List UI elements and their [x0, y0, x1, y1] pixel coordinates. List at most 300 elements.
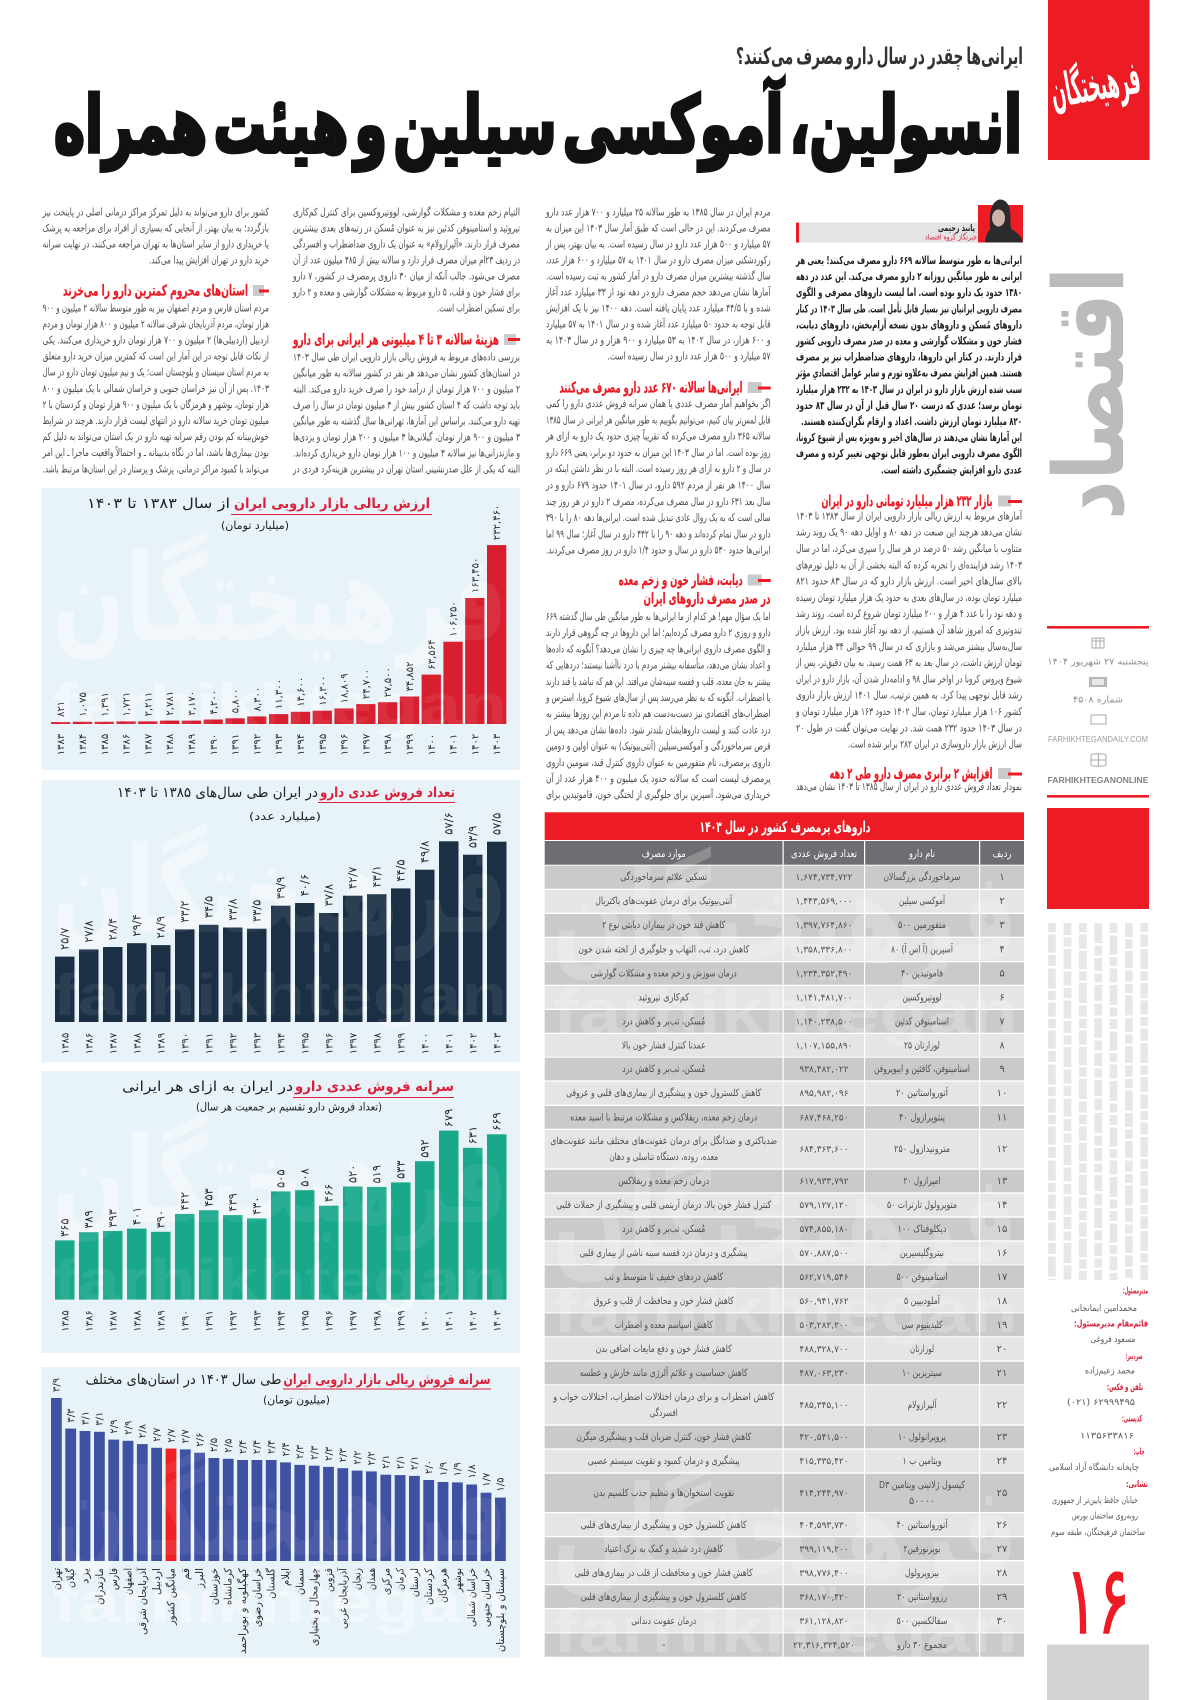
table rows text: ۱۱ [997, 1112, 1007, 1124]
table rows text: متفورمین ۵۰۰ [898, 920, 946, 931]
masthead credits: ۱۱۳۵۶۳۳۸۱۶ [1080, 1432, 1134, 1442]
column 2 opening paragraph [545, 207, 771, 363]
value labels: ۲۴,۷۰۰ [361, 669, 372, 699]
masthead logo panel [1046, 0, 1150, 160]
table rows text: کاهش کلسترول خون و پیشگیری از بیماری‌های قلبی و عروقی [566, 1087, 761, 1099]
section: 232 thousand billion toman market: در سال ۱۴۰۳ حدود ۲۳۲ همت شد. در نهایت می‌توان گفت در طول ۲۰ [796, 721, 1022, 734]
year labels: ۱۴۰۲ [470, 734, 481, 755]
table rows text: آموکسی سیلین [899, 894, 946, 907]
sidebar decorative gray pattern [1052, 923, 1144, 1280]
section: 232 thousand billion toman market: سال ارزش بازار داروسازی در ایران ۲۸۲ برابر شده است. [848, 739, 1022, 751]
value labels: ۲/۱ [410, 1456, 421, 1470]
watermark: فرهیختگان [52, 530, 508, 669]
section: 232 thousand billion toman market: آمارهای مربوط به ارزش ریالی بازار دارویی ایران از سال ۱۳۸۳ تا ۱۴۰۳ [796, 509, 1023, 522]
section: 232 thousand billion toman market: سال‌به‌سال بیشتر می‌شد و بازاری که در سال ۹۹ حوالی ۳۴ هزار میلیارد [796, 641, 1022, 653]
table rows text: پروپرانولول ۱۰ [898, 1432, 946, 1443]
table title bar: داروهای پرمصرف کشور در سال ۱۴۰۳ [700, 818, 871, 837]
table rows text: ۱,۲۳۴,۳۵۲,۴۹۰ [796, 970, 852, 980]
value labels: ۵۷/۵ [490, 813, 504, 835]
table rows text: ۱۴ [997, 1200, 1007, 1211]
chart title: از سال ۱۳۸۳ تا ۱۴۰۳ [87, 496, 230, 512]
section: deprived provinces buy the least: از نکات قابل توجه در این آمار این است که کمترین میزان خرید دارو متعلق [43, 350, 269, 363]
issue information block: شماره ۴۵۰۸ [1073, 696, 1123, 706]
section: deprived provinces buy the least: هزار تومان، مردم آذربایجان شرقی سالانه ۲ میلیون و ۸۰۰ هزار تومان و مردم [43, 317, 269, 330]
value labels: ۴,۲۰۰ [209, 690, 220, 714]
panel: per-capita spending by province chart [42, 1367, 520, 1658]
chart title [87, 496, 432, 532]
author box: خبرنگار گروه اقتصاد [925, 232, 977, 242]
section: diabetes, blood pressure and ulcers: دارو و روزی ۲ دارو مصرف کرده‌ایم؛ اما این داروها در چه گروهی قرار دارند [546, 626, 771, 639]
lead paragraph: ایرانی به طور میانگین روزانه ۲ دارو مصرف می‌کند. این عدد در دهه [796, 270, 1022, 283]
table rows text: ۲۸ [997, 1568, 1008, 1579]
year labels: ۱۳۹۸ [383, 733, 394, 755]
icon: calendar [1092, 638, 1104, 648]
column 4 opening paragraph [42, 207, 269, 267]
province labels: مازندران [94, 1568, 106, 1605]
value labels [52, 1378, 507, 1492]
section: deprived provinces buy the least: بودن بیماری‌ها باشد، اما در نگاه بدبینانه ـ و احتمالاً واقعیت ماجرا ـ این امر [42, 446, 269, 459]
year labels: ۱۳۸۸ [132, 1032, 144, 1054]
table rows text: کاهش درد شدید و کمک به ترک اعتیاد [604, 1544, 723, 1555]
province labels: ایلام [280, 1568, 292, 1586]
year labels: ۱۳۸۹ [156, 1033, 168, 1054]
value labels: ۱۶۳,۴۵۰ [470, 558, 481, 593]
table rows text: ۱۶ [997, 1248, 1007, 1259]
year labels: ۱۳۸۴ [78, 734, 89, 755]
table rows text: سرماخوردگی بزرگسالان [884, 871, 960, 883]
table rows text: ۵۰۳,۲۸۲,۲۰۰ [799, 1321, 849, 1331]
value labels: ۶۷۹ [442, 1109, 456, 1127]
table watermark: farhikhtegan [552, 1597, 1018, 1666]
table rows text: - [662, 1640, 666, 1651]
table column headers: ردیف [992, 848, 1012, 860]
chart title: در ایران به ازای هر ایرانی [122, 1079, 293, 1095]
section: deprived provinces buy the least: میلیون تومان خرید سالانه دارو در انتهای لیست قرار دارند. هرچند در شرایط [43, 415, 269, 427]
province labels: کرمان [395, 1568, 407, 1590]
section: deprived provinces buy the least: می‌تواند با کمبود مراکز درمانی، پزشک و پرستار در این استان‌ها مرتبط باشد. [43, 463, 269, 475]
section: 232 thousand billion toman market: متناوب با میانگین رشد ۵۰ درصد در هر سال را سپری می‌کرد، اما در سال [796, 542, 1022, 555]
lead paragraph: قرار دارند. در کنار این داروها، داروهای ضداضطراب نیز پر مصرف [796, 351, 1022, 364]
section: Iranians consume 670 drugs a year: ایرانی‌ها سالانه ۶۷۰ عدد دارو مصرف می‌کنند [560, 379, 742, 397]
table rows text: ویتامین ب ۱ [902, 1456, 942, 1467]
value labels: ۲,۲۱۱ [143, 692, 154, 716]
year labels: ۱۴۰۲ [468, 1310, 480, 1332]
table rows text: کاهش کلسترول خون و پیشگیری از بیماری‌های قلبی [581, 1591, 747, 1603]
section: annual cost per Iranian: البته که یکی از علل صدرنشینی استان تهران در بیشترین هزینه‌کرد فردی در [292, 463, 520, 475]
value labels: ۱/۹ [438, 1462, 449, 1476]
province labels: چهارمحال و بختیاری [309, 1568, 321, 1646]
section: Iranians consume 670 drugs a year: سال بعد ۶۳۱ دارو در سال مصرف می‌کرده، مصرف ۲ دارو در هر روز چند [546, 496, 771, 508]
watermark: farhikhtegan [52, 1570, 507, 1635]
year labels: ۱۳۹۰ [180, 1310, 192, 1332]
year labels: ۱۳۹۱ [204, 1033, 216, 1054]
table rows text: ۱۸ [997, 1296, 1008, 1307]
chart title: ارزش ریالی بازار دارویی ایران [234, 496, 430, 512]
watermark overlay: farhikhtegan [52, 673, 507, 738]
table rows text: ۳۰ [997, 1616, 1007, 1627]
lead paragraph: مصرف دارویی ایرانیان نیز بسیار قابل تأمل است. طی سال ۱۴۰۳ در کنار [795, 301, 1022, 315]
table rows text: ۲۳ [997, 1432, 1008, 1443]
lead paragraph: هستند. همین افزایش مصرف به‌علاوه تورم و سایر عوامل اقتصادیِ مؤثر [795, 367, 1022, 380]
table rows text: ۵۶۰,۹۴۱,۷۶۲ [799, 1297, 849, 1307]
value labels: ۵۰۵ [274, 1169, 288, 1188]
province labels: بوشهر [452, 1568, 464, 1593]
year labels: ۱۳۹۲ [252, 734, 263, 755]
value labels: ۲/۱ [381, 1455, 392, 1469]
year labels: ۱۳۸۳ [56, 733, 67, 755]
value labels: ۲/۹ [123, 1421, 134, 1435]
table rows text: ۲۱ [997, 1368, 1007, 1379]
section: Iranians consume 670 drugs a year: در سال و ۲ دارو به ازای هر روز رسیده است. البته با در نظر داشتن اینکه در [545, 463, 771, 475]
value labels: ۳/۹ [52, 1378, 63, 1392]
value labels: ۲۸/۴ [106, 918, 120, 940]
column 3 opening paragraph: تیروئید و استامینوفن کدئین نیز به عنوان مُسکن در رتبه‌های بعدی بیشترین [293, 223, 520, 235]
year labels: ۱۳۹۷ [361, 733, 372, 755]
year labels: ۱۳۸۶ [84, 1310, 96, 1332]
section: diabetes, blood pressure and ulcers: بیشتر به جان معده، قلب و قفسه سینه‌شان می‌افتد. این هم که نباشد یا قند دارند [546, 676, 771, 688]
year labels: ۱۳۹۳ [274, 733, 285, 755]
column 3 opening paragraph: برای فشار خون و قلب، ۵ دارو مربوط به مشکلات گوارشی و معده و ۲ دارو [292, 286, 520, 299]
table rows text: بیزوپرولول [905, 1568, 939, 1579]
watermark overlay: فرهیختگان [52, 1112, 508, 1251]
table rows text: پنتوپرازول ۴۰ [899, 1112, 945, 1124]
table rows text: لوزارتان ۲۵ [904, 1040, 940, 1052]
value labels: ۶۳۱ [466, 1126, 480, 1144]
table rows text: درمان عفونت دندانی [631, 1616, 696, 1627]
lead paragraph: ایرانی‌ها به طور متوسط سالانه ۶۶۹ دارو مصرف می‌کنند! یعنی هر [795, 254, 1022, 267]
year labels: ۱۳۸۸ [165, 733, 176, 755]
table rows text: کاهش حساسیت و علائم آلرژی مانند خارش و عطسه [580, 1366, 748, 1379]
table rows text: لووتیروکسین [902, 992, 942, 1004]
table rows text: ۱,۶۷۴,۷۳۴,۷۲۲ [796, 873, 853, 883]
year labels: ۱۳۹۶ [324, 1033, 336, 1054]
table rows text: ۲۷ [997, 1544, 1008, 1555]
table rows text: کاهش درد، تب، التهاب و جلوگیری از لخته شدن خون [578, 944, 749, 956]
masthead credits: ۶۲۹۹۹۴۹۵ (۰۲۱) [1067, 1398, 1135, 1408]
bars [51, 1398, 506, 1561]
chart title [122, 1079, 454, 1114]
table rows text: ۴۱۵,۳۳۵,۴۲۰ [799, 1457, 849, 1467]
section: 232 thousand billion toman market: میلیارد تومان بوده، در سال‌های بعدی به حدود یک هزار میلیارد تومان رسیده [796, 592, 1022, 604]
table rows text: ۶۱۷,۹۳۳,۷۹۲ [799, 1177, 849, 1187]
lead paragraph: این آمارها نشان می‌دهند در سال‌های اخیر و به‌ویژه پس از شیوع کرونا، [796, 430, 1022, 444]
year labels: ۱۳۹۵ [318, 734, 329, 755]
value labels: ۱,۷۲۱ [122, 692, 133, 716]
column 3 opening paragraph: برای تسکین اضطراب است. [437, 303, 520, 315]
value labels: ۴۹/۸ [418, 841, 432, 863]
lead paragraph: ۱۳۸۰ حدود یک دارو بوده است. اما لیست داروهای مصرفی و الگوی [796, 286, 1022, 299]
value labels: ۳۳/۵ [250, 900, 264, 922]
chart title: (میلیارد تومان) [221, 519, 289, 532]
table rows text: ۲۰ [997, 1344, 1007, 1355]
column 2 opening paragraph: شده و با ۴۴/۵ میلیارد عدد پایان یافته است. دهه ۱۴۰۰ نیز با یک افزایش [546, 303, 771, 315]
section: doubling over two decades [796, 764, 1022, 793]
year labels: ۱۳۸۸ [132, 1310, 144, 1332]
value labels: ۱/۵ [496, 1477, 507, 1492]
value labels: ۲/۳ [295, 1444, 306, 1459]
section: 232 thousand billion toman market: کشور ۱۰۶ هزار میلیارد تومان، سال ۱۴۰۲ حدود ۱۶۳ هزار میلیارد تومان و [795, 706, 1022, 718]
value labels: ۳,۱۷۰ [187, 691, 198, 716]
year labels: ۱۳۹۴ [276, 1033, 288, 1054]
table rows text: ۴۸۷,۰۶۳,۲۳۰ [799, 1369, 849, 1379]
section: 232 thousand billion toman market: بازار ۲۳۲ هزار میلیارد تومانی دارو در ایران [822, 492, 992, 510]
table rows text: کاهش فشار خون و محافظت از قلب در بیماری‌های قلبی [575, 1568, 753, 1579]
year labels: ۱۳۸۶ [122, 734, 133, 755]
lead paragraph: داروهای مُسکن و داروهای بدون نسخه آرام‌بخش، داروهای دیابت، [796, 317, 1022, 331]
value labels: ۲/۷ [152, 1427, 163, 1442]
province labels: تهران [51, 1568, 63, 1590]
issue information block: پنجشنبه ۲۷ شهریور ۱۴۰۴ [1048, 658, 1149, 668]
year labels: ۱۴۰۰ [420, 1033, 432, 1054]
table rows text: ۵۰۰۰۰ [909, 1496, 935, 1507]
lead paragraph: سبب شده ارزش بازار دارو در ایران در سال ۱۴۰۳ به ۲۳۲ هزار میلیارد [796, 383, 1022, 396]
table rows text: ۴۱۴,۲۴۴,۹۷۰ [799, 1489, 849, 1499]
value labels: ۱/۸ [467, 1464, 478, 1478]
bars [55, 841, 506, 1022]
value labels: ۳۹۰ [154, 1210, 168, 1228]
value labels: ۵,۸۰۰ [231, 689, 242, 713]
section: diabetes, blood pressure and ulcers: اضطراب‌های اقتصادی نیز دست‌به‌دست هم داده تا مردم این روزها بیشتر به [546, 708, 771, 720]
table rows text: مجموع ۳۰ دارو [896, 1640, 947, 1651]
watermark [52, 1445, 508, 1635]
watermark overlay: farhikhtegan [52, 1570, 507, 1635]
value labels: ۲۷/۸ [82, 920, 96, 943]
page number: ۱۶ [1065, 1546, 1130, 1656]
table rows text: ۱۷ [997, 1272, 1008, 1283]
section: annual cost per Iranian: ۲ میلیون و ۷۰۰ هزار تومان از درآمد خود را صرف خرید دارو می‌کند. البته [293, 382, 520, 395]
icon: social [1091, 754, 1106, 766]
lead paragraph: الگوی مصرف دارویی ایران به‌طور قابل توجهی تغییر کرده و مصرف [796, 447, 1022, 460]
table rows text: مُسکن، تب‌بر و کاهش درد [622, 1016, 705, 1028]
section: annual cost per Iranian: هزینۀ سالانه ۳ تا ۴ میلیونی هر ایرانی برای دارو [292, 330, 499, 348]
table rows text: ۳ [999, 920, 1005, 931]
watermark: farhikhtegan [52, 1248, 507, 1313]
table rows text: استامینوفن کدئین [895, 1016, 949, 1028]
year labels: ۱۴۰۳ [492, 1032, 504, 1054]
table rows text: ۲۵ [997, 1488, 1007, 1499]
table rows text: معده، روده، دستگاه تناسلی و دهان [609, 1151, 718, 1163]
year labels [56, 733, 503, 755]
year labels: ۱۳۹۵ [300, 1033, 312, 1054]
table rows text: ۵۶۲,۷۱۹,۵۴۶ [799, 1273, 849, 1283]
province labels: قم [180, 1568, 192, 1580]
sidebar red block [1047, 808, 1149, 909]
province labels: یزد [80, 1568, 92, 1584]
table rows text: ۳۹۸,۷۷۶,۴۰۰ [799, 1569, 849, 1579]
value labels: ۵۳۳ [394, 1160, 408, 1179]
value labels: ۱۸,۸۰۹ [340, 673, 351, 703]
column 2 opening paragraph: قابل توجه به حدود ۵۰ میلیارد عدد آغاز شده و در سال ۱۴۰۱ به ۵۷ میلیارد [546, 318, 771, 331]
province labels: خوزستان [208, 1568, 220, 1605]
section: Iranians consume 670 drugs a year [545, 379, 771, 557]
table rows text: استامینوفن ۵۰۰ [896, 1272, 948, 1283]
value labels: ۱۶,۳۰۰ [318, 676, 329, 706]
chart title [86, 1372, 491, 1406]
masthead credits [1049, 1287, 1148, 1538]
section: 232 thousand billion toman market: و دهه نود را با عدد ۴ هزار و ۲۰۰ میلیارد تومان شروع کرده است. روند رشد [796, 608, 1022, 620]
table rows text: ۵ [999, 968, 1005, 980]
section: 232 thousand billion toman market: تومان ارزش داشت، در سال بعد به ۶۳ همت رسید. به بیان دقیق‌تر، پس از [795, 657, 1022, 669]
table rows text: کاهش دردهای خفیف تا متوسط و تب [604, 1272, 723, 1283]
chart title: (میلیون تومان) [263, 1394, 330, 1406]
value labels: ۴۰۱ [130, 1207, 144, 1225]
year labels: ۱۳۸۷ [143, 733, 154, 755]
watermark overlay [52, 530, 508, 738]
section: Iranians consume 670 drugs a year: اگر بخواهیم آمار مصرف عددی یا همان سرانه فروش عددی دارو را کمی [546, 397, 771, 410]
value labels: ۲/۶ [195, 1433, 206, 1447]
value labels: ۸,۳۰۰ [252, 687, 263, 711]
value labels: ۲/۲ [352, 1450, 363, 1465]
section: deprived provinces buy the least: هزار تومان، بوشهر و هرمزگان با یک میلیون و ۹۰۰ هزار تومان و کردستان با ۲ [43, 398, 269, 411]
section: deprived provinces buy the least [42, 282, 269, 475]
year labels: ۱۳۹۹ [405, 734, 416, 755]
author box [796, 200, 1023, 243]
year labels: ۱۴۰۱ [444, 1310, 456, 1332]
value labels: ۳۷/۸ [322, 884, 336, 906]
column 2 opening paragraph: رکوردشکنی میزان مصرف دارو در سال ۱۴۰۱ به ۵۷ میلیارد و ۶۰۰ هزار عدد، [546, 255, 771, 267]
table rows text: ۱۵ [997, 1224, 1007, 1235]
column 2 opening paragraph: مصرف می‌کردند. این در حالی است که طبق آمار سال ۱۴۰۳ این میزان به [546, 222, 771, 235]
table rows text: متوپرولول تارترات ۵۰ [887, 1200, 957, 1211]
year labels: ۱۳۹۸ [372, 1032, 384, 1054]
chart title: (تعداد فروش دارو تقسیم بر جمعیت هر سال) [196, 1100, 382, 1114]
province labels: خراسان رضوی [251, 1568, 263, 1627]
lead paragraph: عددی دارو افزایش چشمگیری داشته است. [881, 464, 1022, 476]
section: diabetes, blood pressure and ulcers [545, 571, 771, 801]
province labels: قزوین [323, 1568, 335, 1592]
value labels: ۳۴/۵ [202, 896, 216, 918]
bars [55, 1131, 506, 1300]
year labels: ۱۳۹۶ [324, 1310, 336, 1332]
value labels: ۳۴,۸۵۲ [405, 661, 416, 692]
table rows text: ۵۷۹,۱۲۷,۱۲۰ [799, 1201, 849, 1211]
value labels: ۲/۳ [338, 1447, 349, 1462]
table rows text: سیتریزین ۱۰ [902, 1368, 942, 1379]
section: doubling over two decades: نمودار تعداد فروش عددی دارو در ایران از سال ۱۳۸۵ تا ۱۴۰۳ نشان می‌دهد [796, 781, 1022, 793]
table rows text: ۳۶۸,۱۷۰,۴۲۰ [799, 1593, 849, 1603]
table rows text: کاهش اسپاسم معده و اضطراب [615, 1320, 713, 1331]
column 2 opening paragraph: آمارها نشان می‌دهد حجم مصرف دارو در دهه نود از ۳۳ میلیارد عدد آغاز [545, 286, 771, 299]
watermark: farhikhtegan [52, 963, 507, 1028]
table rows text: آتورواستاتین ۲۰ [896, 1086, 949, 1099]
value labels: ۲۹/۴ [130, 914, 144, 937]
value labels: ۵۰۸ [298, 1168, 312, 1187]
table rows text: ۱۹ [997, 1320, 1007, 1331]
chart title [117, 785, 455, 823]
value labels: ۱۱,۳۰۰ [274, 679, 285, 709]
year labels: ۱۳۹۴ [296, 734, 307, 755]
section: Iranians consume 670 drugs a year: روز بوده است. اما در سال ۱۴۰۳ این میزان به حدود دو برابر، یعنی ۶۶۹ دارو [545, 447, 771, 459]
author photo [978, 200, 1023, 242]
section: Iranians consume 670 drugs a year: سالانه ۳۶۵ دارو مصرف می‌کرده که تقریباً چیزی حدود یک دارو به ازای هر [545, 428, 771, 443]
table title bar [545, 812, 1024, 840]
section: 232 thousand billion toman market [795, 492, 1023, 751]
value labels: ۲/۹ [109, 1419, 120, 1434]
province labels: زنجان [352, 1568, 364, 1590]
province labels: آذربایجان غربی [336, 1567, 349, 1629]
province labels: آذربایجان شرقی [136, 1567, 149, 1635]
watermark [52, 1112, 508, 1313]
value labels: ۳۸۹ [82, 1210, 96, 1229]
table rows text: ۷ [999, 1016, 1005, 1028]
table rows text: آملودیپین ۵ [904, 1294, 941, 1307]
watermark: farhikhtegan [52, 673, 507, 738]
watermark: فرهیختگان [52, 1445, 508, 1584]
table rows text: کنترل فشار خون بالا، درمان آریتمی قلبی و پیشگیری از حملات قلبی [556, 1198, 771, 1211]
masthead credits: تلفن و فکس: [1107, 1383, 1143, 1393]
table rows text: درمان زخم معده و ریفلاکس [618, 1176, 709, 1187]
watermark overlay: فرهیختگان [52, 530, 508, 669]
table row backgrounds [545, 841, 1024, 1657]
value labels: ۵۷/۶ [442, 812, 456, 835]
chart title: تعداد فروش عددی دارو [319, 785, 455, 801]
year labels: ۱۳۸۹ [156, 1310, 168, 1332]
value labels: ۲۳۲,۴۶۰ [492, 505, 503, 540]
table rows text: سفالکسین ۵۰۰ [896, 1616, 948, 1627]
table rows text: پیشگیری و درمان درد قفسه سینه ناشی از بیماری قلبی [580, 1247, 748, 1259]
province labels: کردستان [423, 1568, 435, 1605]
value labels: ۳۳/۸ [226, 898, 240, 921]
year labels: ۱۳۸۷ [108, 1032, 120, 1054]
section: deprived provinces buy the least: مردم استان فارس و مردم اصفهان نیز به طور متوسط سالانه ۲ میلیون و ۹۰۰ [43, 302, 269, 314]
value labels: ۲/۵ [224, 1439, 234, 1453]
table rows text: پیشگیری و درمان کمبود و تقویت سیستم عصبی [588, 1455, 740, 1467]
section: diabetes, blood pressure and ulcers: درد عادت کنند و لیست داروهایشان بلندتر شود. داده‌ها نشان می‌دهد پس از [545, 724, 771, 736]
value labels: ۲/۴ [281, 1442, 292, 1456]
value labels: ۴۳۹ [226, 1193, 240, 1212]
table rows text [550, 871, 1008, 1651]
column 3 opening paragraph: مصرف قرار دارند. «آلپرازولام» به عنوان یک داروی ضداضطراب و افسردگی [293, 238, 520, 251]
section label: economy: اقتصاد [1033, 267, 1146, 520]
table rows text: کاهش قند خون در بیماران دیابتی نوع ۲ [602, 920, 725, 931]
table rows text: تسکین علائم سرماخوردگی [620, 871, 707, 883]
table rows text: ۴ [999, 944, 1005, 956]
value labels: ۲/۷ [166, 1428, 177, 1443]
issue information block: FARHIKHTEGANDAILY.COM [1048, 735, 1148, 744]
value labels [56, 505, 503, 717]
lead paragraph [795, 254, 1022, 476]
value labels: ۱/۷ [481, 1472, 492, 1487]
province labels: خراسان شمالی [466, 1568, 478, 1627]
year labels: ۱۳۹۴ [276, 1310, 288, 1332]
table rows text: ۲۹ [997, 1592, 1007, 1603]
table rows text: آنتی‌بیوتیک برای درمان عفونت‌های باکتریال [595, 894, 733, 907]
table rows text: کپسول ژلاتینی ویتامین D۳ [879, 1480, 965, 1491]
table rows text: کاهش فشار خون و دفع مایعات اضافی بدن [596, 1344, 732, 1355]
table rows text: ۸ [999, 1040, 1005, 1052]
year labels: ۱۳۸۹ [187, 734, 198, 755]
table rows text: فاموتیدین ۴۰ [901, 968, 943, 980]
value labels: ۱,۰۷۵ [78, 692, 89, 717]
masthead credits: کدپستی: [1122, 1415, 1142, 1425]
year labels: ۱۴۰۲ [468, 1033, 480, 1054]
masthead credits: مسعود فروغی [1090, 1335, 1136, 1345]
table rows text: کاهش اضطراب و برای درمان اختلالات اضطراب، اختلالات خواب و [552, 1392, 774, 1403]
year labels: ۱۳۹۱ [231, 734, 242, 755]
value labels: ۴۳/۱ [370, 865, 384, 888]
value labels: ۱,۳۹۱ [100, 692, 111, 717]
table rows text: ۱,۳۹۷,۷۶۴,۸۶۰ [796, 921, 852, 931]
section: 232 thousand billion toman market: بالای سال‌های اخیر است. ارزش بازار دارو که در سال ۸۳ حدود ۸۲۱ [796, 576, 1022, 588]
province labels: فارس [108, 1568, 120, 1590]
province labels: کرمانشاه [223, 1568, 235, 1605]
table rows text: آتورواستاتین ۴۰ [896, 1518, 948, 1531]
province labels: هرمزگان [436, 1568, 450, 1603]
chart title: طی سال ۱۴۰۳ در استان‌های مختلف [86, 1372, 282, 1388]
section: diabetes, blood pressure and ulcers: یا اضطراب. آنگونه که به نظر می‌رسد پس از سال‌های شیوع کرونا، استرس و [545, 691, 771, 704]
table rows text: کاهش کلسترول خون و پیشگیری از بیماری‌های قلبی [581, 1519, 747, 1531]
watermark [52, 822, 508, 1028]
